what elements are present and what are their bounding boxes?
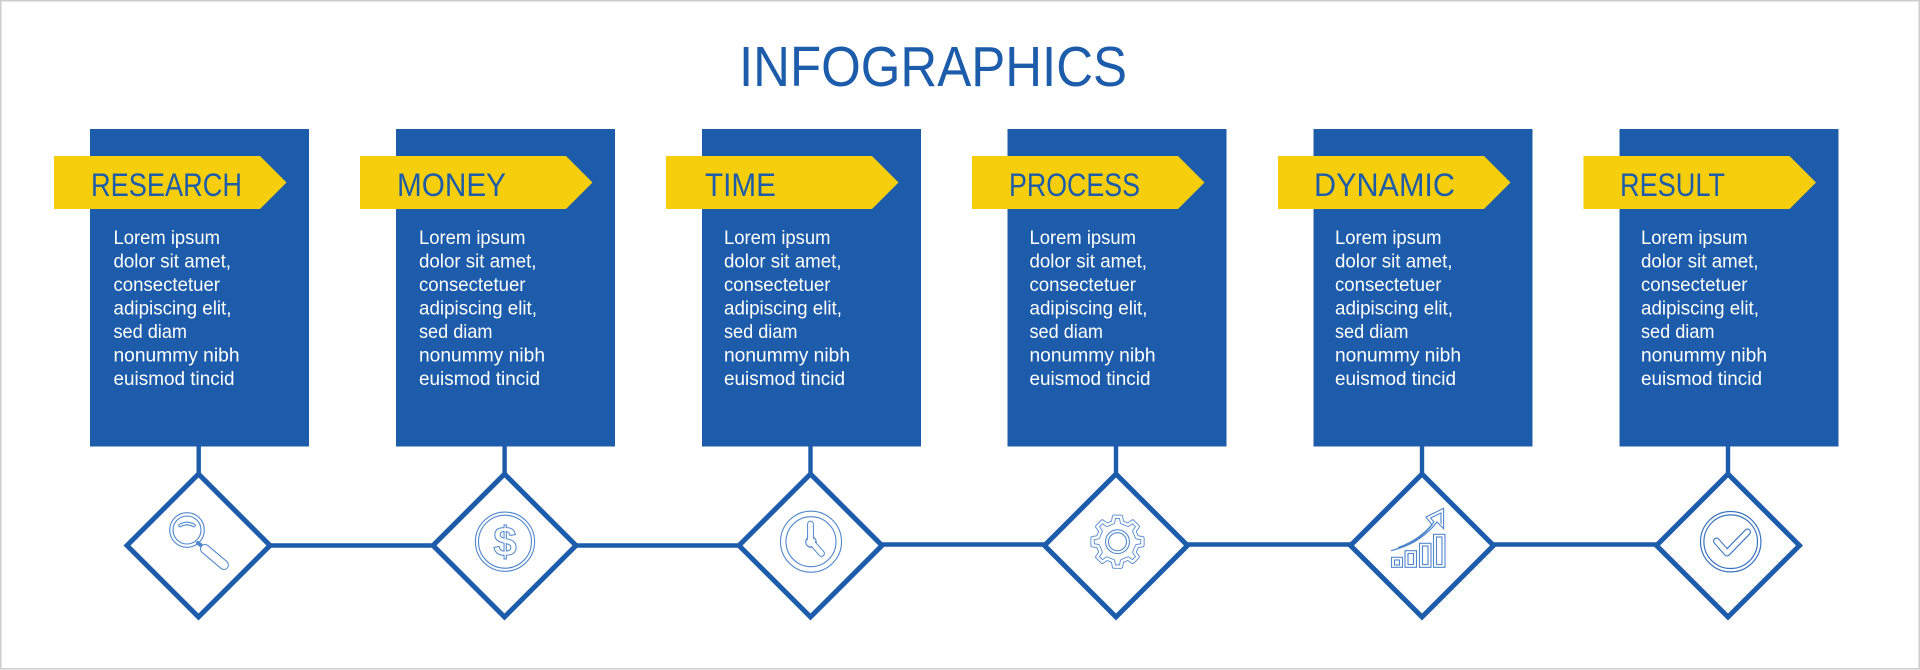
money heading: MONEY	[397, 167, 506, 203]
result card	[1620, 129, 1838, 446]
title: INFOGRAPHICS	[739, 35, 1127, 99]
process body text: sed diam	[1030, 321, 1103, 343]
process body text: Lorem ipsum	[1030, 227, 1136, 249]
research body text: adipiscing elit,	[114, 298, 232, 320]
process stem	[1114, 446, 1118, 474]
research heading: RESEARCH	[91, 167, 242, 203]
dynamic banner	[1278, 156, 1510, 209]
result body text: sed diam	[1641, 321, 1714, 343]
panel: research	[54, 129, 309, 617]
icon: check mark	[1700, 512, 1761, 572]
money banner	[360, 156, 592, 209]
time banner	[666, 156, 898, 209]
process diamond	[1044, 474, 1188, 617]
dynamic body text: dolor sit amet,	[1335, 250, 1452, 272]
dynamic body text: sed diam	[1335, 321, 1408, 343]
research stem	[196, 446, 201, 474]
dynamic stem	[1420, 446, 1424, 474]
result body text: nonummy nibh	[1641, 344, 1767, 366]
dynamic body text: Lorem ipsum	[1335, 227, 1442, 249]
result banner	[1584, 156, 1816, 209]
result heading: RESULT	[1620, 167, 1725, 203]
process body text: consectetuer	[1030, 274, 1136, 296]
process body text	[1030, 227, 1156, 390]
icon: dollar coin	[475, 512, 535, 571]
icon: clock	[780, 511, 842, 572]
process card	[1008, 129, 1226, 446]
money body text: euismod tincid	[419, 368, 540, 390]
time stem	[808, 446, 813, 474]
result body text: euismod tincid	[1641, 368, 1762, 390]
research body text: sed diam	[114, 321, 187, 343]
research body text: dolor sit amet,	[114, 250, 231, 272]
research body text: euismod tincid	[114, 368, 234, 390]
panel: money	[360, 129, 615, 617]
money body text: sed diam	[419, 321, 492, 343]
money body text: adipiscing elit,	[419, 298, 537, 320]
money card	[396, 129, 615, 446]
money body text: consectetuer	[419, 274, 526, 296]
process body text: nonummy nibh	[1030, 344, 1156, 366]
dynamic heading: DYNAMIC	[1314, 167, 1455, 203]
dynamic body text: adipiscing elit,	[1335, 298, 1453, 320]
connector lines between diamonds	[270, 544, 1657, 546]
icon: growth chart	[1391, 508, 1445, 567]
research body text: Lorem ipsum	[114, 227, 220, 249]
money body text: nonummy nibh	[419, 344, 545, 366]
time body text: adipiscing elit,	[724, 298, 842, 320]
money body text: Lorem ipsum	[419, 227, 526, 249]
result body text: dolor sit amet,	[1641, 250, 1758, 272]
panel: dynamic	[1278, 129, 1532, 617]
process body text: euismod tincid	[1030, 368, 1150, 390]
icon: magnifying glass	[170, 513, 224, 565]
money diamond	[433, 474, 576, 617]
dynamic card	[1314, 129, 1532, 446]
time diamond	[739, 474, 882, 617]
panel: result	[1584, 129, 1838, 617]
time card	[702, 129, 921, 446]
research banner	[54, 156, 286, 209]
research diamond	[127, 474, 270, 617]
result diamond	[1656, 474, 1800, 617]
dynamic body text: euismod tincid	[1335, 368, 1456, 390]
dynamic diamond	[1350, 474, 1494, 617]
research body text: consectetuer	[114, 274, 220, 296]
time body text: euismod tincid	[724, 368, 845, 390]
result stem	[1726, 446, 1730, 474]
process banner	[972, 156, 1204, 209]
money body text	[419, 227, 545, 390]
time body text: Lorem ipsum	[724, 227, 830, 249]
panel: process	[972, 129, 1226, 617]
time body text: consectetuer	[724, 274, 831, 296]
time heading: TIME	[705, 167, 776, 203]
process heading: PROCESS	[1009, 167, 1140, 203]
result body text	[1641, 227, 1767, 390]
result body text: adipiscing elit,	[1641, 298, 1759, 320]
process body text: dolor sit amet,	[1030, 250, 1147, 272]
research body text: nonummy nibh	[114, 344, 240, 366]
panel: time	[666, 129, 921, 617]
money body text: dolor sit amet,	[419, 250, 536, 272]
process body text: adipiscing elit,	[1030, 298, 1148, 320]
money stem	[502, 446, 507, 474]
dynamic body text: consectetuer	[1335, 274, 1442, 296]
dynamic body text	[1335, 227, 1461, 390]
dynamic body text: nonummy nibh	[1335, 344, 1461, 366]
time body text: dolor sit amet,	[724, 250, 842, 272]
time body text: nonummy nibh	[724, 344, 850, 366]
result body text: consectetuer	[1641, 274, 1748, 296]
research body text	[114, 227, 240, 390]
time body text: sed diam	[724, 321, 798, 343]
result body text: Lorem ipsum	[1641, 227, 1748, 249]
time body text	[724, 227, 850, 390]
icon: dollar coin: $	[493, 518, 517, 565]
icon: gear	[1093, 517, 1142, 567]
research card	[90, 129, 309, 446]
